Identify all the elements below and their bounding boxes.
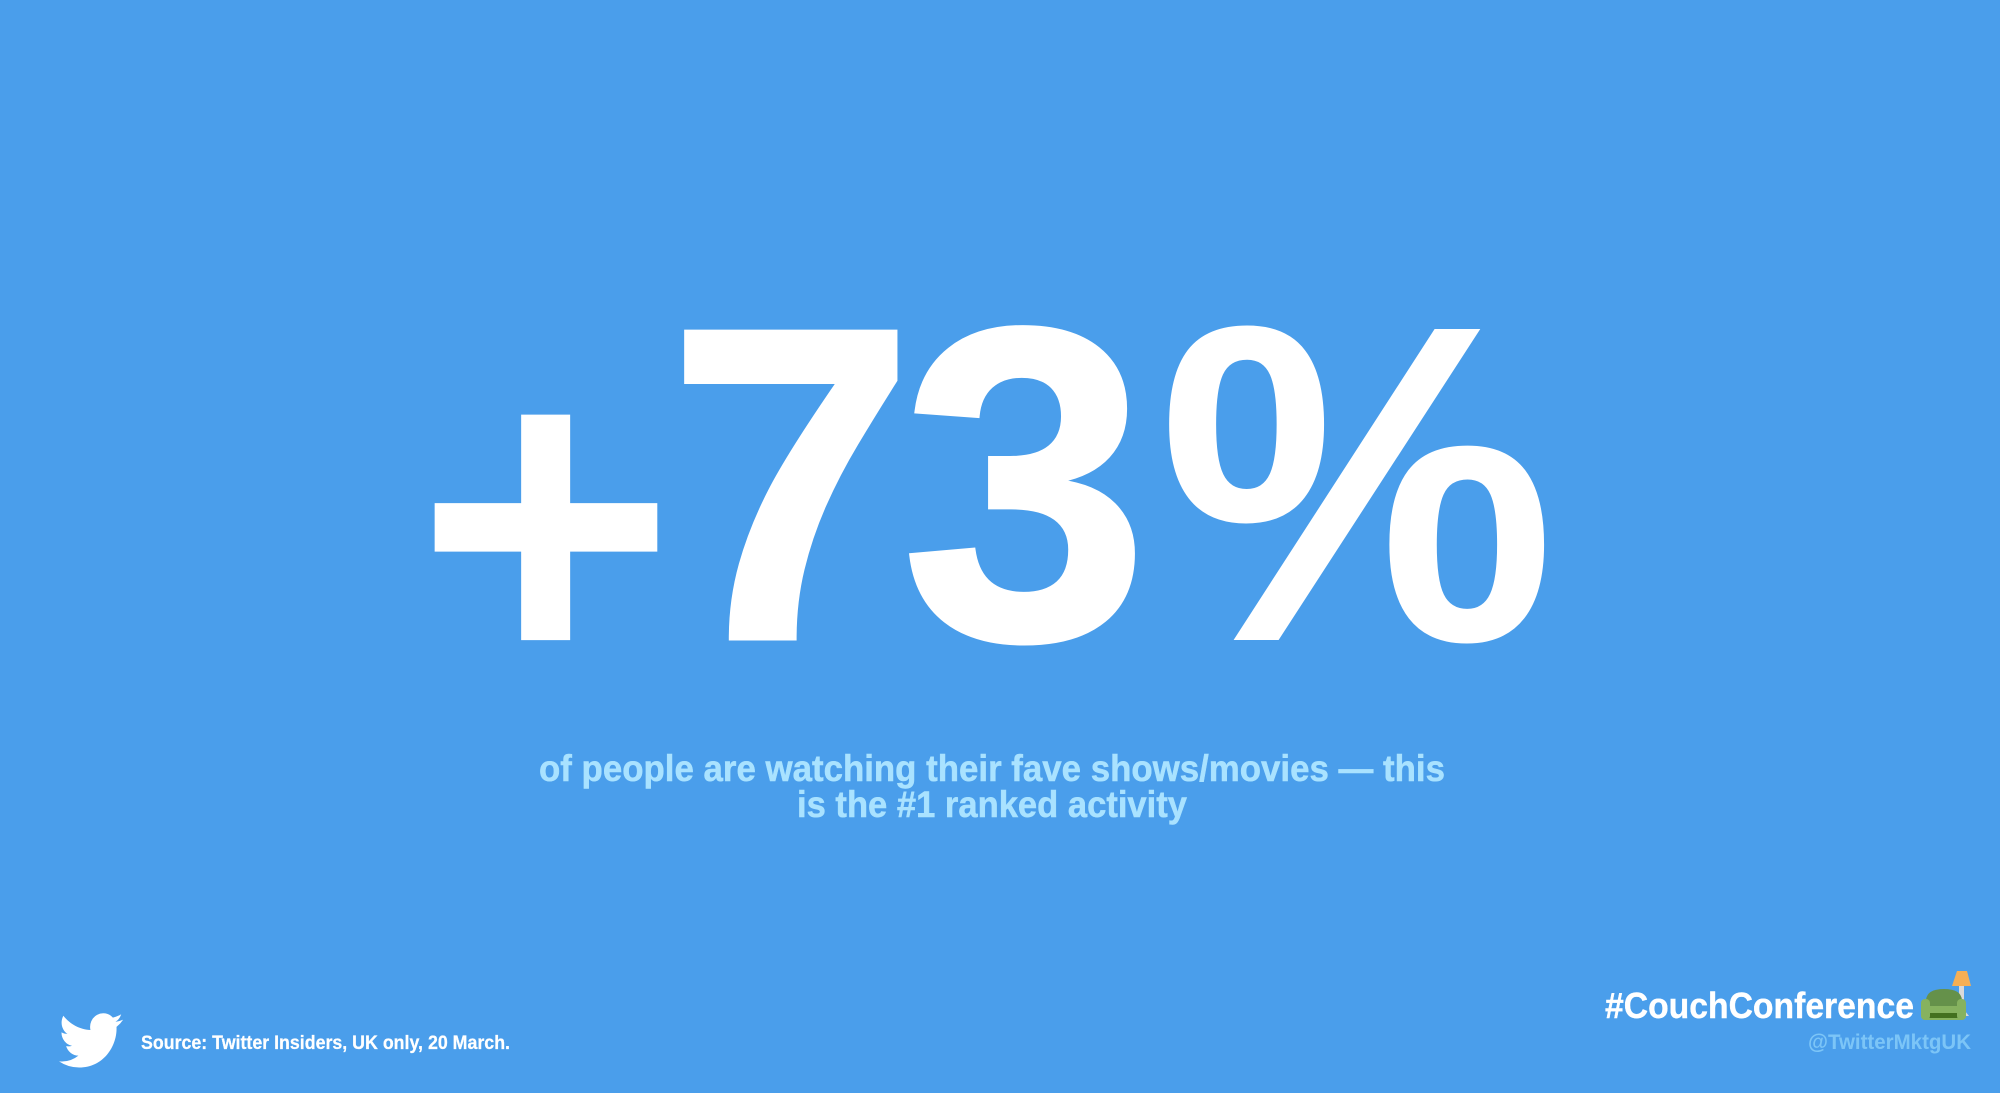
source note: Source: Twitter Insiders, UK only, 20 March. [141, 1033, 510, 1054]
main statistic [416, 232, 1556, 770]
subtitle text: is the #1 ranked activity [797, 784, 1187, 825]
icon: twitter bird [59, 1013, 123, 1067]
main statistic: % [1158, 232, 1556, 736]
icon: couch and lamp [1921, 971, 1971, 1020]
main statistic: + [416, 274, 675, 770]
hashtag: #CouchConference [1605, 985, 1914, 1026]
subtitle text [539, 748, 1445, 825]
subtitle text: of people are watching their fave shows/movies — this [539, 748, 1445, 789]
main statistic: 3 [901, 234, 1149, 734]
main statistic: 7 [667, 234, 915, 734]
twitter handle: @TwitterMktgUK [1808, 1031, 1971, 1054]
